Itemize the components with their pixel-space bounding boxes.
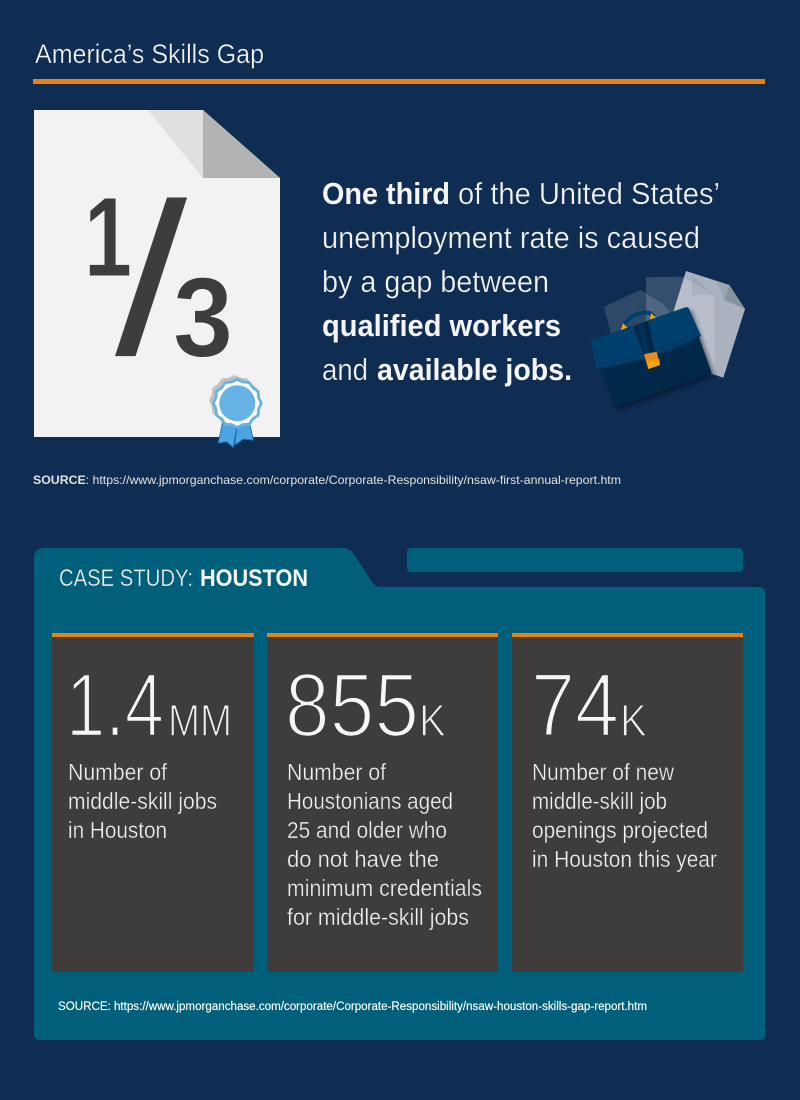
icon: briefcase with documents <box>590 271 745 411</box>
card: new job openings <box>512 633 743 972</box>
card: Houstonians without credentials: minimum credentials <box>287 875 482 901</box>
source line: SOURCE: https://www.jpmorganchase.com/corporate/Corporate-Responsibility/nsaw-first-annual-report.htm <box>33 473 621 487</box>
headline statement: available jobs. <box>377 352 572 387</box>
folder second tab <box>407 548 743 572</box>
card: jobs in Houston: Number of <box>68 759 168 785</box>
headline statement: One third <box>322 176 450 211</box>
icon: document with one third fraction: / <box>115 158 188 400</box>
card: new job openings: K <box>620 695 647 746</box>
card: new job openings: 74 <box>531 656 619 756</box>
panel heading <box>59 565 308 592</box>
card: Houstonians without credentials: 25 and older who <box>287 817 447 843</box>
card: jobs in Houston <box>52 633 254 972</box>
card: Houstonians without credentials <box>267 633 498 972</box>
title underline <box>33 79 765 84</box>
headline statement <box>322 176 720 387</box>
card: new job openings: middle-skill job <box>532 788 667 814</box>
card: jobs in Houston: in Houston <box>68 817 167 843</box>
panel heading: CASE STUDY: <box>59 565 193 592</box>
card: Houstonians without credentials: for middle-skill jobs <box>287 904 469 930</box>
card: Houstonians without credentials: Houstonians aged <box>287 788 453 814</box>
card: new job openings: in Houston this year <box>532 846 717 872</box>
headline statement: qualified workers <box>322 308 561 343</box>
case study source line: SOURCE: https://www.jpmorganchase.com/corporate/Corporate-Responsibility/nsaw-houston-skills-gap-report.htm <box>58 1001 647 1013</box>
title: America’s Skills Gap <box>35 39 264 69</box>
panel heading: HOUSTON <box>200 565 308 592</box>
card: Houstonians without credentials: Number of <box>287 759 387 785</box>
card: jobs in Houston: 1.4 <box>66 656 164 756</box>
headline statement: unemployment rate is caused <box>322 220 700 255</box>
icon: award ribbon <box>209 375 263 447</box>
headline statement: and <box>322 352 368 387</box>
card: Houstonians without credentials: 855 <box>285 656 419 756</box>
card: new job openings: Number of new <box>532 759 674 785</box>
panel: case study folder <box>34 548 765 1040</box>
card: jobs in Houston: MM <box>168 695 232 746</box>
card: jobs in Houston: middle-skill jobs <box>68 788 217 814</box>
card: Houstonians without credentials: K <box>419 695 446 746</box>
icon: document with one third fraction <box>34 110 280 437</box>
card: Houstonians without credentials: do not have the <box>287 846 439 872</box>
icon: document with one third fraction: 1 <box>84 174 132 300</box>
card: new job openings: openings projected <box>532 817 708 843</box>
headline statement: by a gap between <box>322 264 549 299</box>
headline statement: of the United States’ <box>458 176 720 211</box>
icon: document with one third fraction: 3 <box>173 254 233 380</box>
